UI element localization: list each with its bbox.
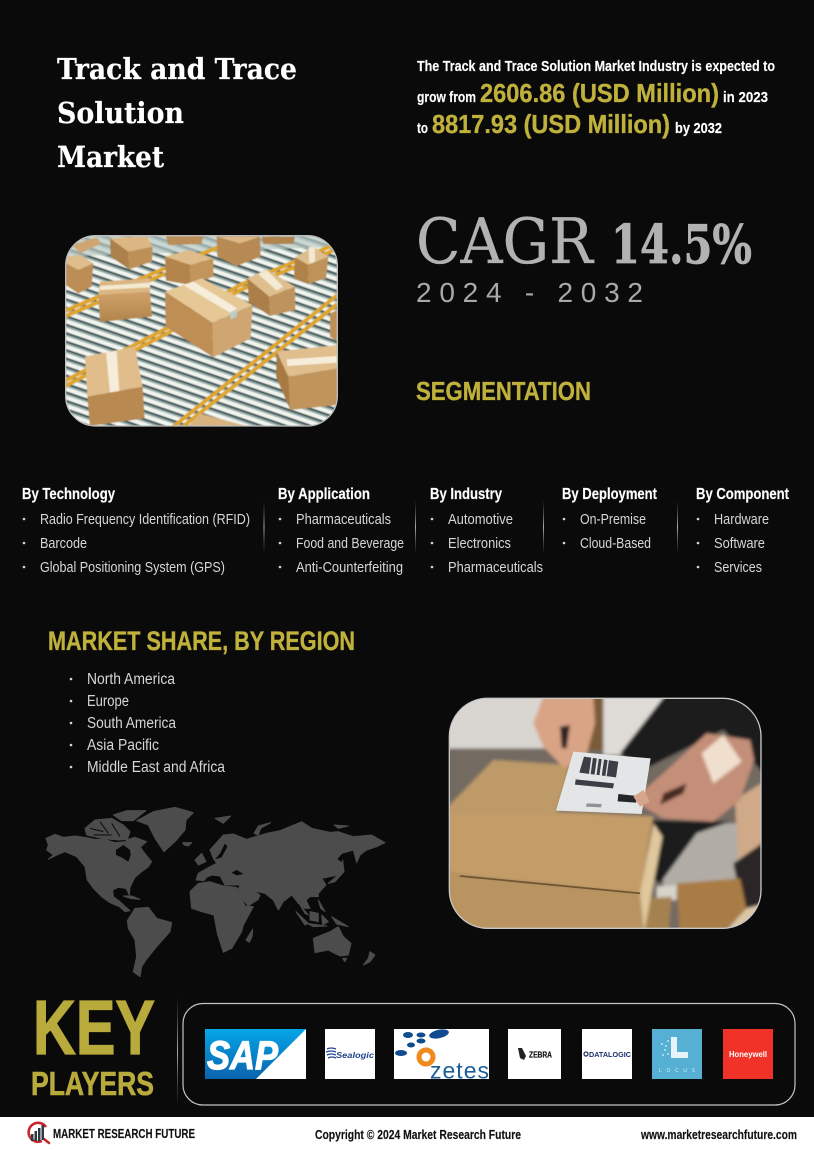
segment dividers xyxy=(264,500,678,554)
logo: Datalogic xyxy=(582,1029,632,1079)
CAGR period: 2024 - 2032 xyxy=(416,277,643,308)
logo: zetes xyxy=(394,1028,489,1084)
segment: by deployment: On-Premise xyxy=(580,512,646,528)
segment: by technology xyxy=(22,486,250,576)
footer bar xyxy=(0,1117,814,1150)
market size statement: 2606.86 (USD Million) xyxy=(480,78,719,108)
segment: by component: Software xyxy=(714,536,765,552)
region list: Middle East and Africa xyxy=(87,759,225,776)
segment: by technology: Barcode xyxy=(40,536,87,552)
key players heading: KEY xyxy=(33,985,155,1071)
segment: by industry: Automotive xyxy=(448,512,513,528)
CAGR value xyxy=(416,205,752,278)
market size statement: in 2023 xyxy=(723,90,768,106)
key players heading: PLAYERS xyxy=(31,1065,154,1102)
segment: by deployment: Cloud-Based xyxy=(580,536,651,552)
logo: Locus: LOCUS xyxy=(659,1068,696,1074)
segment: by application: Food and Beverage xyxy=(296,536,404,552)
segment: by component: By Component xyxy=(696,486,790,503)
logo: Sealogic: Sealogic xyxy=(336,1051,375,1060)
segment: by technology: Radio Frequency Identification (RFID) xyxy=(40,512,250,528)
CAGR value: CAGR xyxy=(416,205,594,278)
logo: zetes: zetes xyxy=(430,1058,489,1084)
segment: by deployment: By Deployment xyxy=(562,486,658,503)
segmentation heading: SEGMENTATION xyxy=(416,376,591,406)
logo: Honeywell: Honeywell xyxy=(729,1049,767,1059)
market size statement: grow from xyxy=(417,90,476,106)
market size statement xyxy=(417,59,775,139)
logo: Zebra xyxy=(508,1029,561,1079)
segment: by application: Pharmaceuticals xyxy=(296,512,391,528)
title: Track and Trace xyxy=(57,52,297,86)
icon: market research future logo xyxy=(29,1123,49,1143)
market size statement: by 2032 xyxy=(675,121,722,137)
key players panel xyxy=(183,1004,795,1105)
logo: SAP: SAP xyxy=(207,1034,278,1078)
CAGR value: 14.5% xyxy=(611,214,752,276)
photo: hands labelling a box xyxy=(443,693,767,933)
logo: Datalogic: DATALOGIC xyxy=(589,1050,632,1059)
segment: by technology: By Technology xyxy=(22,486,115,503)
segment: by technology: Global Positioning System (GPS) xyxy=(40,560,225,576)
market share heading: MARKET SHARE, BY REGION xyxy=(48,626,355,656)
segment: by application: Anti-Counterfeiting xyxy=(296,560,403,576)
key players heading xyxy=(31,985,155,1102)
title: Solution xyxy=(57,96,184,130)
segment: by industry: By Industry xyxy=(430,486,502,503)
region list: North America xyxy=(87,671,175,688)
segment: by component: Services xyxy=(714,560,762,576)
region list: Europe xyxy=(87,693,129,710)
region list: Asia Pacific xyxy=(87,737,159,754)
market size statement: 8817.93 (USD Million) xyxy=(432,109,670,139)
segment: by component xyxy=(696,486,790,576)
market size statement: to xyxy=(417,121,428,137)
region list xyxy=(70,671,225,776)
region list: South America xyxy=(87,715,176,732)
segment: by application: By Application xyxy=(278,486,370,503)
photo: boxes on conveyor xyxy=(60,230,343,430)
logo: Sealogic xyxy=(325,1029,375,1079)
copyright: Copyright © 2024 Market Research Future xyxy=(315,1128,521,1142)
world map xyxy=(46,807,385,977)
brand name: MARKET RESEARCH FUTURE xyxy=(53,1127,195,1141)
title: Market xyxy=(57,140,165,174)
logo: Locus xyxy=(652,1029,702,1079)
segment: by application xyxy=(278,486,404,576)
segment: by deployment xyxy=(562,486,658,552)
logo: Zebra: ZEBRA xyxy=(529,1050,552,1060)
segment: by industry: Electronics xyxy=(448,536,511,552)
segment: by industry xyxy=(430,486,543,576)
segment: by industry: Pharmaceuticals xyxy=(448,560,543,576)
title xyxy=(57,52,297,174)
logo: Honeywell xyxy=(723,1029,773,1079)
key players divider xyxy=(177,995,178,1107)
segment: by component: Hardware xyxy=(714,512,769,528)
